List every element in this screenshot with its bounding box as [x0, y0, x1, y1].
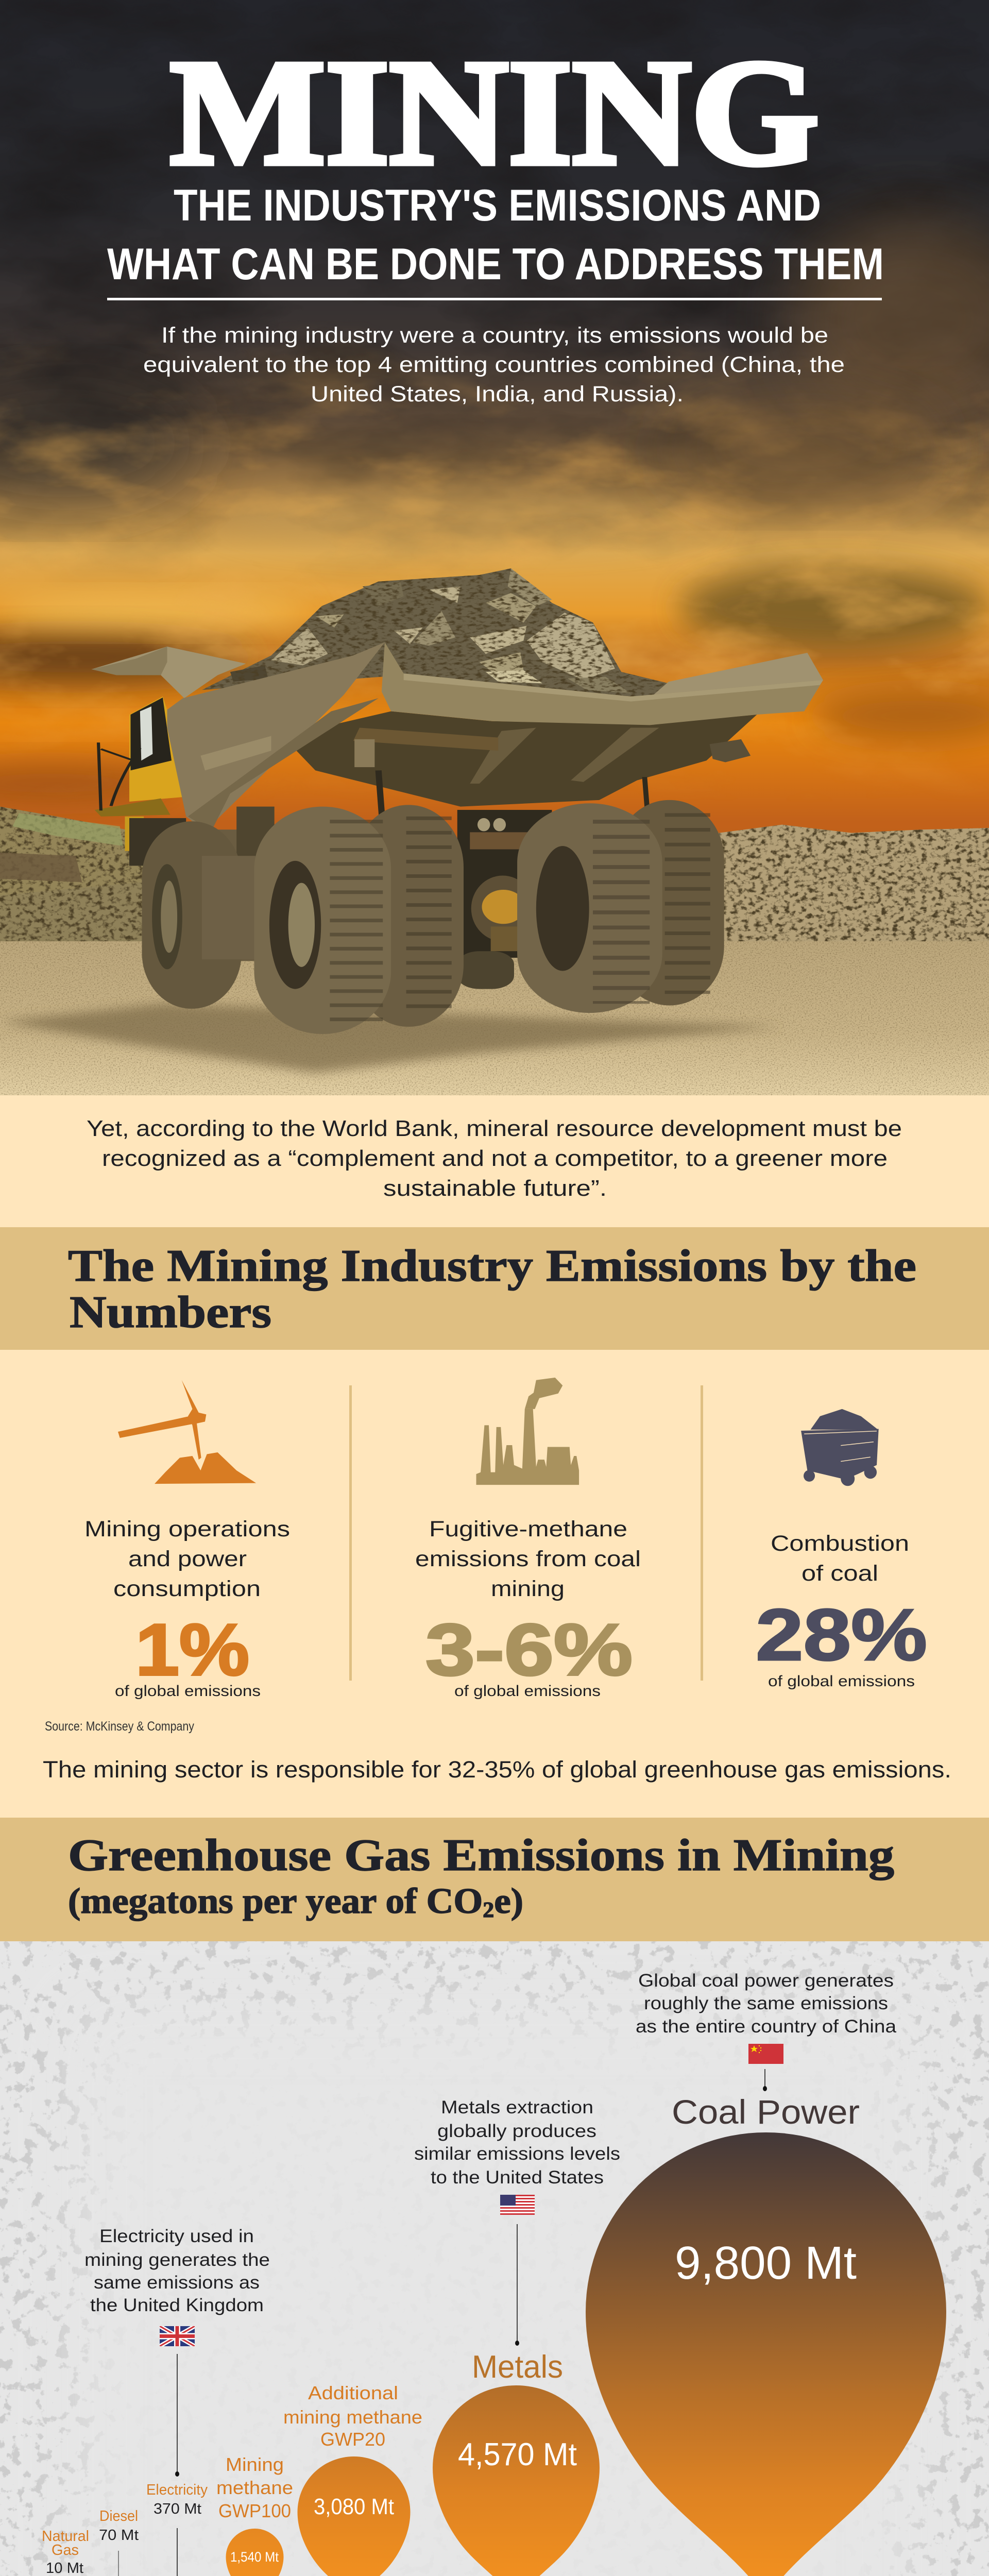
stat: fugitive methane: 3-6% [425, 1609, 633, 1691]
stat: mining operations: Mining operations [84, 1517, 290, 1541]
heading band: greenhouse gas emissions: (megatons per year of CO [68, 1882, 465, 1921]
label: additional methane GWP20: mining methane [283, 2406, 422, 2428]
drop: methane GWP100 1,540 Mt: 1,540 Mt [230, 2549, 279, 2565]
stat: combustion of coal: of global emissions [768, 1673, 915, 1690]
annotation: electricity and UK: Electricity used in [99, 2226, 254, 2246]
stat: fugitive methane: of global emissions [454, 1683, 601, 1700]
annotation: coal power: roughly the same emissions [644, 1993, 888, 2013]
cream background [0, 1095, 989, 1818]
rock load [202, 568, 738, 697]
background hills and rock piles [0, 807, 989, 974]
stat: mining operations: and power [128, 1547, 247, 1571]
ground shadow [0, 1004, 782, 1073]
intro text: United States, India, and Russia). [311, 382, 684, 406]
stat: fugitive methane [415, 1378, 641, 1700]
label: diesel 70 Mt: 70 Mt [99, 2527, 139, 2544]
heading band: greenhouse gas emissions: e) [494, 1882, 523, 1921]
label: natural gas 10 Mt: Gas [52, 2542, 79, 2558]
dump truck [92, 568, 823, 1034]
stat: combustion of coal: of coal [802, 1561, 878, 1586]
annotation: coal power: Global coal power generates [638, 1971, 894, 1991]
World Bank statement: sustainable future”. [383, 1176, 607, 1201]
sky [0, 0, 989, 1095]
annotation: electricity and UK: same emissions as [94, 2273, 260, 2293]
key statement: The mining sector is responsible for 32-35% of global greenhouse gas emissions. [43, 1756, 951, 1783]
annotation: electricity and UK [84, 2226, 270, 2477]
annotation: electricity and UK: the United Kingdom [90, 2295, 264, 2315]
stat: fugitive methane: Fugitive-methane [429, 1517, 627, 1541]
heading band: by the numbers: The Mining Industry Emissions by the [68, 1241, 916, 1291]
panel: grey grunge background [0, 1941, 989, 2576]
stat: fugitive methane: emissions from coal [415, 1547, 641, 1571]
label: coal power: Coal Power [672, 2093, 860, 2131]
chassis and axle [129, 770, 651, 989]
dump bed [167, 642, 823, 831]
heading band: by the numbers: Numbers [70, 1287, 271, 1337]
heading band: greenhouse gas emissions [0, 1818, 989, 1941]
stat: combustion of coal: Combustion [771, 1531, 909, 1556]
cab [95, 697, 189, 851]
World Bank statement: Yet, according to the World Bank, mineral resource development must be [87, 1116, 902, 1141]
rear-right wheels [517, 800, 724, 1013]
icon: China flag [748, 2044, 783, 2064]
annotation: coal power [636, 1971, 897, 2091]
subtitle [107, 181, 884, 289]
label: methane GWP100: methane [216, 2477, 293, 2498]
annotation: metals [414, 2097, 620, 2346]
title: MINING [170, 29, 819, 196]
label: methane GWP100: GWP100 [218, 2500, 291, 2521]
heading band: by the numbers [0, 1227, 989, 1350]
icon: US flag [500, 2195, 535, 2215]
label: natural gas 10 Mt [42, 2528, 89, 2576]
label: additional methane GWP20: GWP20 [320, 2429, 385, 2450]
label: additional methane GWP20 [283, 2382, 422, 2450]
annotation: electricity and UK: mining generates the [84, 2250, 270, 2270]
World Bank statement: recognized as a “complement and not a competitor, to a greener more [102, 1146, 888, 1171]
drop: coal power 9,800 Mt: 9,800 Mt [675, 2238, 857, 2289]
annotation: metals: to the United States [431, 2167, 604, 2188]
drop: methane GWP20 3,080 Mt [298, 2456, 410, 2576]
label: diesel 70 Mt [99, 2508, 139, 2576]
label: methane GWP100: Mining [226, 2454, 284, 2475]
stat: combustion of coal: 28% [756, 1594, 927, 1676]
stat: mining operations [84, 1380, 290, 1700]
drop: coal power 9,800 Mt [586, 2132, 946, 2576]
label: methane GWP100 [216, 2454, 293, 2521]
label: electricity 370 Mt [146, 2482, 208, 2576]
annotation: metals: globally produces [437, 2121, 596, 2141]
intro text: equivalent to the top 4 emitting countries combined (China, the [143, 352, 845, 377]
drop: metals 4,570 Mt: 4,570 Mt [458, 2437, 577, 2472]
heading band: greenhouse gas emissions: 2 [483, 1899, 494, 1922]
subtitle: THE INDUSTRY'S EMISSIONS AND [174, 181, 821, 230]
ground [0, 941, 989, 1095]
label: additional methane GWP20: Additional [308, 2382, 398, 2403]
intro text: If the mining industry were a country, its emissions would be [161, 323, 828, 348]
label: diesel 70 Mt: Diesel [99, 2508, 138, 2524]
stat: mining operations: of global emissions [115, 1683, 261, 1700]
chart: emissions drops [63, 2132, 946, 2576]
drop: methane GWP100 1,540 Mt [226, 2529, 283, 2576]
stat: fugitive methane: mining [491, 1577, 565, 1601]
rear-left wheels [142, 805, 464, 1034]
label: electricity 370 Mt: Electricity [146, 2482, 208, 2498]
drop: methane GWP20 3,080 Mt: 3,080 Mt [314, 2494, 394, 2519]
annotation: metals: Metals extraction [441, 2097, 593, 2117]
label: electricity 370 Mt: 370 Mt [154, 2501, 201, 2517]
icon: coal cart [801, 1409, 879, 1486]
stat: mining operations: consumption [113, 1577, 261, 1601]
label: metals: Metals [472, 2349, 563, 2385]
intro text [143, 323, 845, 406]
stat: mining operations: 1% [135, 1609, 249, 1691]
annotation: metals: similar emissions levels [414, 2144, 620, 2164]
icon: UK flag [160, 2326, 195, 2346]
drop: metals 4,570 Mt [433, 2385, 600, 2576]
source note: Source: McKinsey & Company [45, 1719, 194, 1734]
label: natural gas 10 Mt: Natural [42, 2528, 89, 2545]
stat: combustion of coal [756, 1409, 927, 1690]
subtitle: WHAT CAN BE DONE TO ADDRESS THEM [107, 240, 884, 289]
hero background: mine at sunset with dump truck [0, 0, 989, 1095]
annotation: coal power: as the entire country of China [636, 2016, 897, 2037]
icon: pickaxe on ore pile [118, 1380, 256, 1484]
World Bank statement [87, 1116, 902, 1201]
canopy [92, 647, 246, 698]
hill details [0, 813, 123, 882]
title [107, 29, 884, 289]
heading band: greenhouse gas emissions: Greenhouse Gas Emissions in Mining [68, 1831, 894, 1880]
icon: factory with smoke [476, 1378, 579, 1485]
